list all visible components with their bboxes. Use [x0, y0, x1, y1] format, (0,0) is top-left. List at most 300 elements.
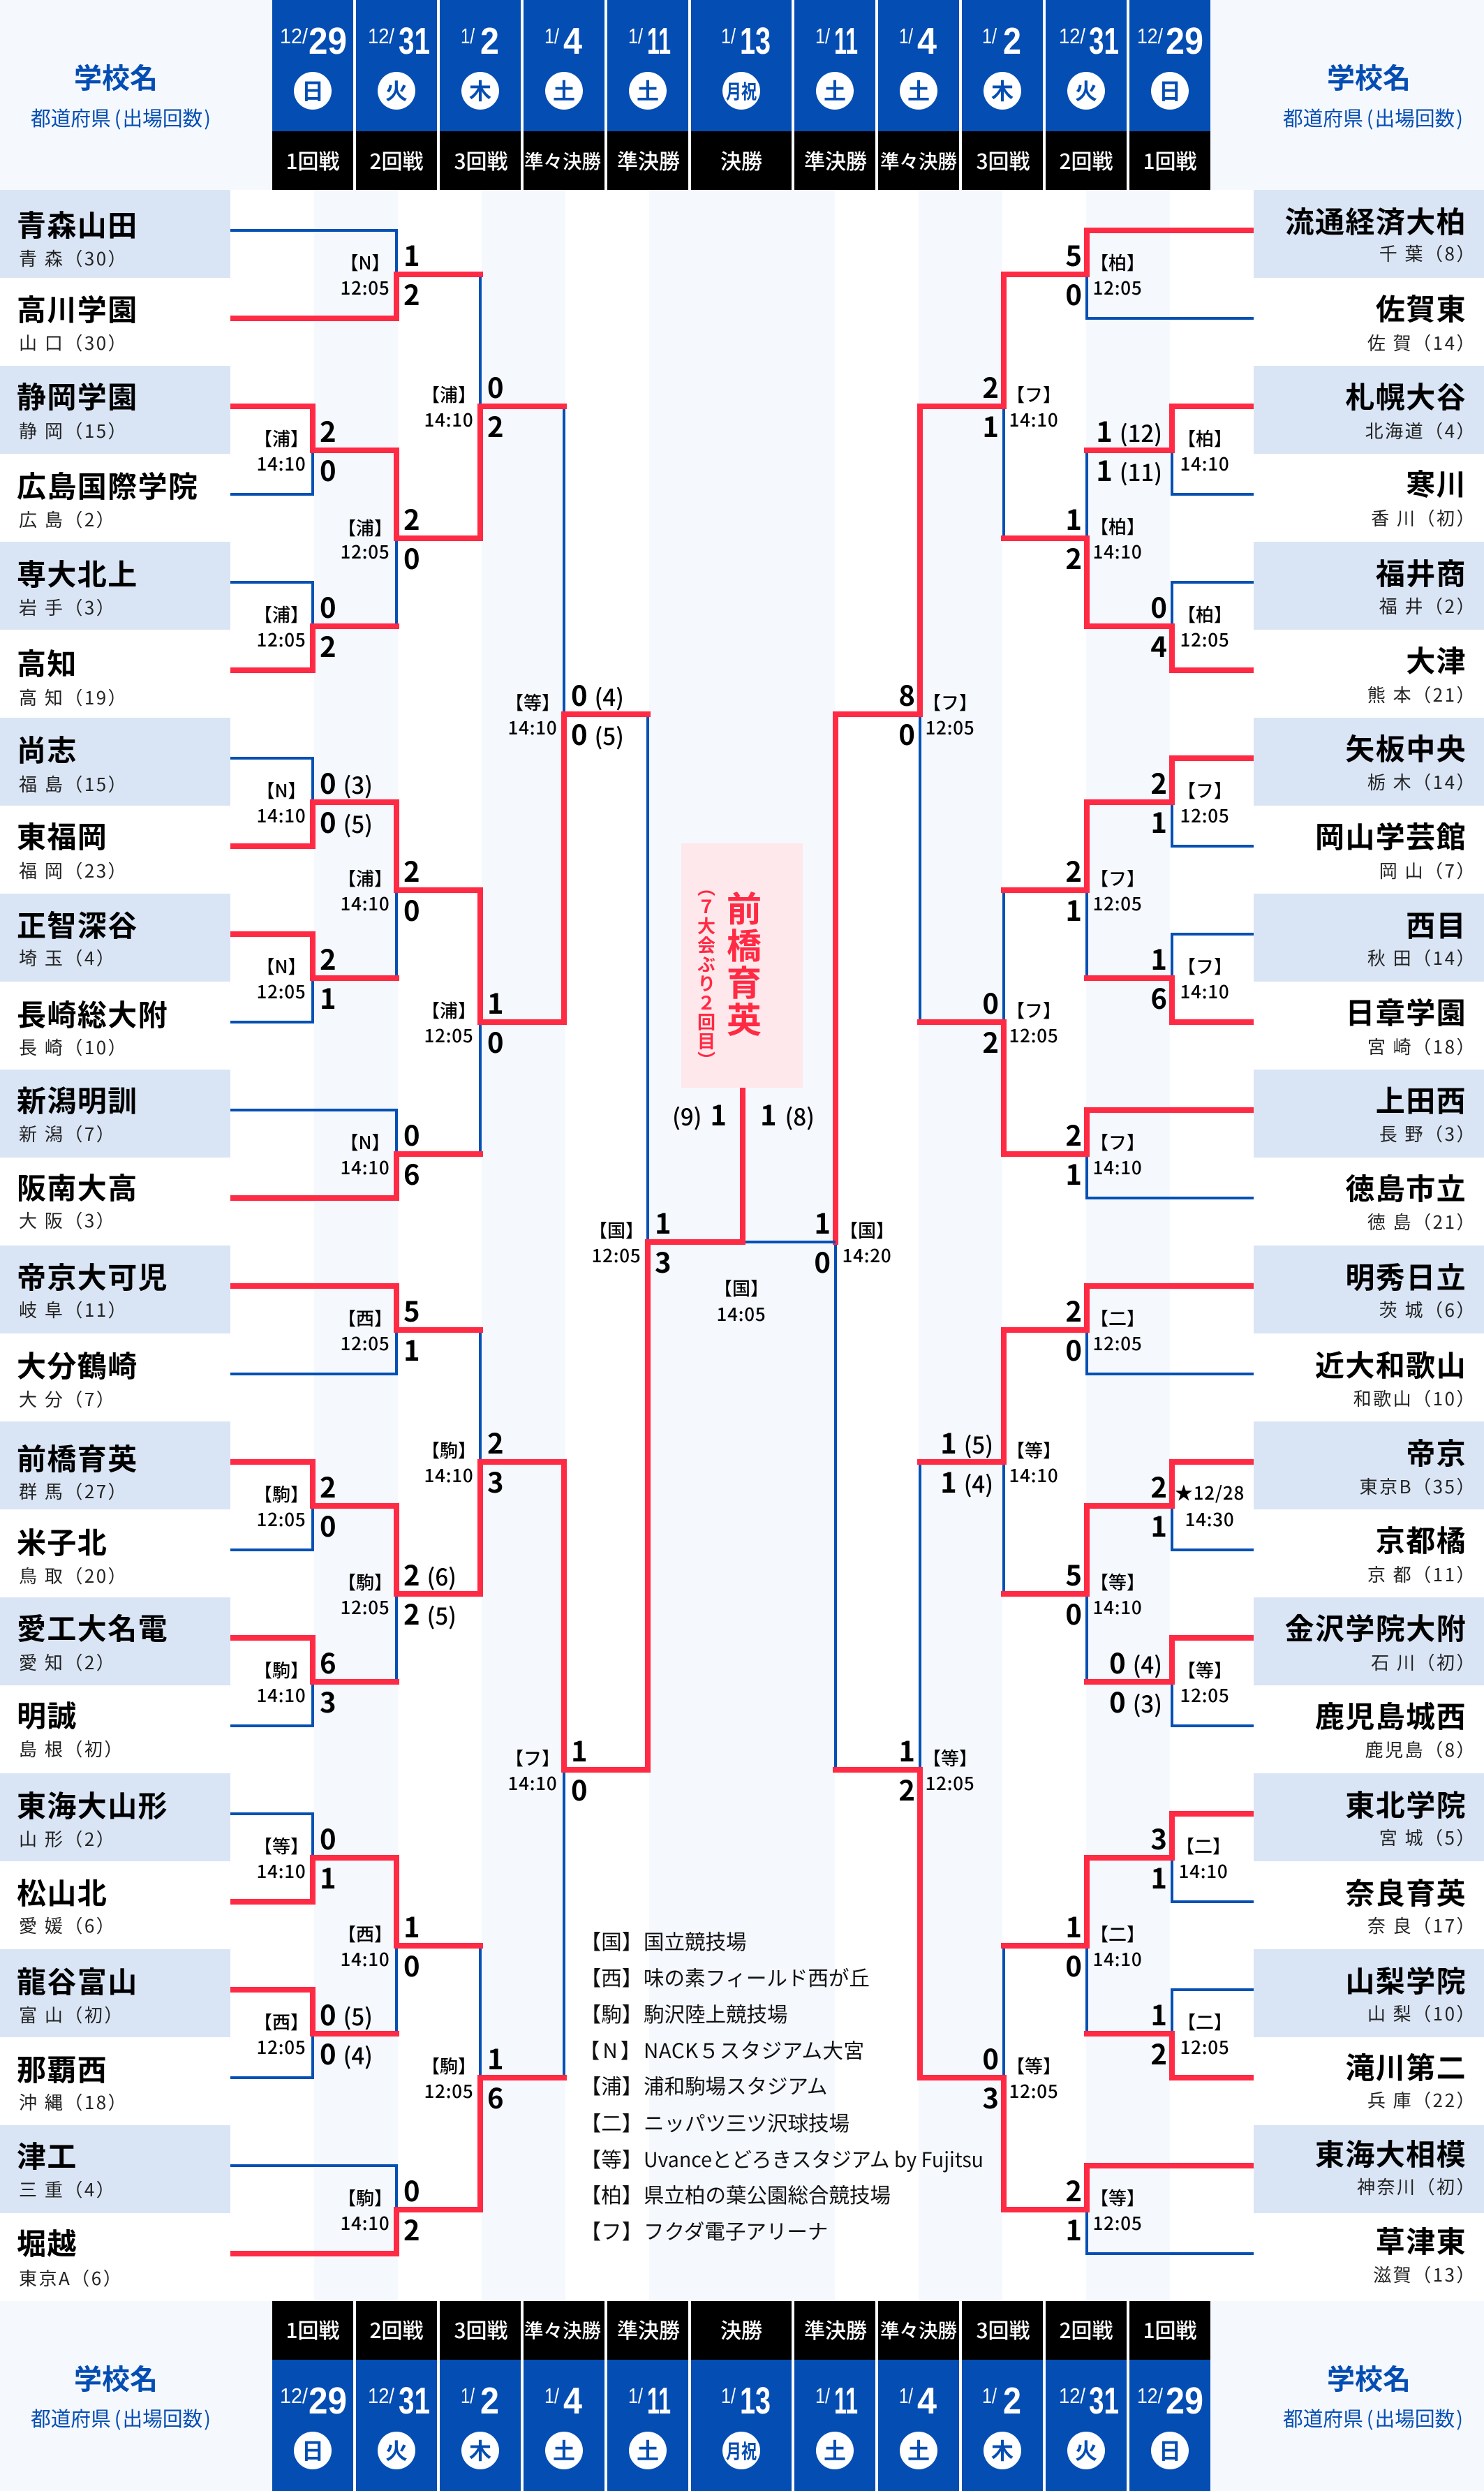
match: 2回戦 帝京 vs 金沢学院大附: 0: [1065, 1592, 1082, 1633]
top header: right school label: 都道府県(出場回数): [1283, 103, 1463, 132]
match: 3回戦 矢板中央 vs 上田西: 12:05: [1009, 1022, 1059, 1048]
match: 札幌大谷 vs 寒川: 1 (12): [1096, 410, 1162, 450]
team: 東福岡: [17, 814, 128, 883]
team: 鹿児島城西: [1315, 1694, 1476, 1762]
match: 3回戦 帝京大可児 vs 前橋育英: 【駒】: [422, 1437, 476, 1463]
team: 明誠: 島 根（初）: [19, 1736, 124, 1761]
match: 上田西 vs 徳島市立: 2: [1065, 1114, 1082, 1154]
team: 青森山田: 青 森（30）: [19, 245, 128, 271]
top header column: 1/11 準決勝: 準決勝: [617, 145, 680, 175]
team: 岡山学芸館: 岡 山（7）: [1379, 857, 1476, 883]
match: 2回戦 静岡学園 vs 高知: 0: [403, 537, 420, 577]
match: 福井商 vs 大津: [1150, 582, 1254, 670]
top header: left school label: 都道府県(出場回数): [31, 103, 211, 132]
match: 帝京 vs 京都橘: ★12/28: [1175, 1479, 1245, 1505]
team: 大分鶴崎: [17, 1343, 138, 1412]
top header column: 1/13 決勝: 決勝: [720, 145, 762, 175]
match: 3回戦 帝京大可児 vs 前橋育英: [396, 1330, 504, 1594]
match: 準々決勝 静岡学園 vs 東福岡: [480, 406, 624, 1022]
top header column: 1/4 準々決勝 right: 1/: [899, 24, 913, 48]
team: 近大和歌山: 近大和歌山: [1315, 1343, 1467, 1385]
match: 2回戦 松山北 vs 龍谷富山: 0: [403, 1944, 420, 1985]
legend: venues: 味の素フィールド西が丘: [644, 1963, 870, 1992]
bottom header column: 1/11 準決勝 right: [794, 2301, 875, 2491]
bottom header column: 12/29 1回戦 right: 12/: [1137, 2383, 1163, 2408]
team: 明誠: 明誠: [17, 1693, 77, 1736]
top header column: 1/2 3回戦: 1/: [461, 24, 475, 48]
bottom header column: 1/2 3回戦 right: 木: [991, 2434, 1014, 2466]
team: 東北学院: [1345, 1782, 1476, 1850]
team: 高知: 高知: [17, 641, 77, 683]
match: 龍谷富山 vs 那覇西: 12:05: [256, 2034, 306, 2060]
match: 龍谷富山 vs 那覇西: 0 (4): [320, 2032, 373, 2073]
match: 尚志 vs 東福岡: 14:10: [256, 802, 306, 828]
match: 3回戦 高川学園 vs 静岡学園: [396, 274, 504, 538]
match: 2回戦 矢板中央 vs 日章学園: 12:05: [1092, 890, 1143, 916]
legend: venues: 県立柏の葉公園総合競技場: [644, 2180, 891, 2209]
match: 山梨学院 vs 滝川第二: 1: [1150, 1993, 1167, 2034]
top header column: 12/29 1回戦 right: 29: [1166, 20, 1203, 62]
bottom header column: 1/13 決勝: 1/: [721, 2383, 736, 2408]
team: 札幌大谷: [1345, 374, 1476, 443]
team: 奈良育英: 奈良育英: [1345, 1870, 1467, 1913]
team: 明秀日立: 明秀日立: [1345, 1255, 1467, 1297]
match: 準々決勝 流通経済大柏 vs 上田西: 8: [898, 674, 915, 714]
top header column: 1/4 準々決勝 right: 4: [917, 20, 937, 62]
top header column: 1/2 3回戦 right: 木: [991, 74, 1014, 106]
team: 前橋育英: 群 馬（27）: [19, 1478, 128, 1504]
match: 前橋育英 vs 米子北: 2: [320, 1465, 336, 1506]
team: 松山北: [17, 1870, 116, 1938]
bottom header column: 12/29 1回戦 right: 日: [1159, 2434, 1181, 2466]
match: 3回戦 流通経済大柏 vs 大津: 2: [982, 366, 999, 406]
top header column: 1/13 決勝: 月祝: [726, 77, 757, 105]
bottom header column: 12/31 2回戦 right: 2回戦: [1059, 2314, 1113, 2344]
background: bracket column stripes: [314, 190, 1170, 2301]
match: 準決勝 流通経済大柏 vs 東海大相模: [814, 714, 920, 1770]
match: 札幌大谷 vs 寒川: [1096, 406, 1254, 494]
match: 明秀日立 vs 近大和歌山: [1065, 1286, 1254, 1374]
match: 西目 vs 日章学園: [1150, 934, 1254, 1022]
match: 準々決勝 帝京 vs 東海大相模: 【等】: [923, 1745, 977, 1771]
match: 上田西 vs 徳島市立: 1: [1065, 1153, 1082, 1193]
match: 正智深谷 vs 長崎総大附: 1: [320, 977, 336, 1017]
top header column: 1/2 3回戦: 木: [469, 74, 491, 106]
team: 流通経済大柏: 流通経済大柏: [1285, 199, 1467, 242]
team: 東福岡: 東福岡: [17, 814, 107, 857]
top header column: 1/11 準決勝 right: 11: [834, 20, 858, 62]
match: 準々決勝 静岡学園 vs 東福岡: 0 (4): [571, 674, 624, 714]
match: 矢板中央 vs 岡山学芸館: 【フ】: [1178, 777, 1232, 803]
match: 札幌大谷 vs 寒川: 14:10: [1180, 450, 1230, 476]
match: 東海大山形 vs 松山北: 【等】: [254, 1833, 309, 1858]
team: 西目: [1367, 903, 1476, 970]
match: 準々決勝 帝京 vs 東海大相模: [898, 1462, 1004, 2078]
match: 東北学院 vs 奈良育英: 【二】: [1176, 1833, 1231, 1858]
team: 鹿児島城西: 鹿児島（8）: [1365, 1736, 1476, 1762]
team: 龍谷富山: [17, 1959, 138, 2027]
match: 2回戦 東福岡 vs 正智深谷: 0: [403, 889, 420, 929]
right teams shaded rows: [1254, 190, 1484, 2213]
bottom header: right school label: [1210, 2301, 1484, 2491]
match: 東北学院 vs 奈良育英: 1: [1150, 1856, 1167, 1897]
bottom header: right school label: 学校名: [1327, 2357, 1411, 2397]
team: 東海大相模: [1315, 2131, 1476, 2199]
team: 広島国際学院: 広島国際学院: [17, 464, 198, 506]
match: 3回戦 東福岡 vs 阪南大高: [396, 890, 504, 1154]
top header column: 12/31 2回戦: 31: [399, 20, 430, 62]
team: 大津: 大津: [1406, 638, 1467, 681]
match: 2回戦 東北学院 vs 滝川第二: 0: [1065, 1944, 1082, 1985]
match: 明秀日立 vs 近大和歌山: 【二】: [1090, 1305, 1145, 1331]
team: 明秀日立: [1345, 1255, 1476, 1322]
team: 福井商: [1376, 551, 1476, 619]
bottom header column: 12/29 1回戦 right: [1129, 2301, 1210, 2491]
match: 東海大相模 vs 草津東: 【等】: [1090, 2185, 1145, 2210]
final match lines and scores: 1 (8): [760, 1093, 815, 1134]
top header column: 1/11 準決勝: 1/: [628, 24, 643, 48]
match: 準決勝 流通経済大柏 vs 東海大相模: 1: [814, 1202, 831, 1242]
team: 上田西: [1376, 1078, 1476, 1146]
bottom header column: 12/29 1回戦: 29: [309, 2380, 347, 2422]
top header column: 12/31 2回戦 right: 火: [1075, 74, 1097, 106]
match: 3回戦 矢板中央 vs 上田西: 0: [982, 982, 999, 1022]
top header column: 12/31 2回戦: [356, 0, 437, 190]
top header column: 12/29 1回戦 right: 1回戦: [1143, 145, 1197, 175]
match: 帝京 vs 京都橘: 1: [1150, 1505, 1167, 1545]
team: 静岡学園: [17, 374, 138, 443]
match: 2回戦 東福岡 vs 正智深谷: 【浦】: [338, 865, 392, 891]
team: 明誠: [17, 1693, 124, 1761]
team: 青森山田: 青森山田: [17, 202, 138, 245]
team: 米子北: 米子北: [17, 1520, 107, 1562]
match: 西目 vs 日章学園: 1: [1150, 938, 1167, 978]
match: 静岡学園 vs 広島国際学院: 14:10: [256, 450, 306, 476]
final match lines and scores: [648, 1091, 836, 1326]
match: 帝京大可児 vs 大分鶴崎: 1: [403, 1329, 420, 1369]
match: 準々決勝 前橋育英 vs 堀越: 0: [571, 1768, 588, 1809]
match: 矢板中央 vs 岡山学芸館: 2: [1150, 762, 1167, 802]
match: 3回戦 帝京大可児 vs 前橋育英: 2: [487, 1421, 504, 1462]
team: 山梨学院: [1345, 1958, 1476, 2026]
team: 帝京大可児: 岐 阜（11）: [19, 1296, 128, 1322]
team: 長崎総大附: 長 崎（10）: [19, 1034, 128, 1060]
bottom header column: 1/2 3回戦: 1/: [461, 2383, 475, 2408]
match: 2回戦 松山北 vs 龍谷富山: 1: [403, 1905, 420, 1946]
team: 静岡学園: 静 岡（15）: [19, 417, 128, 443]
team: 上田西: 長 野（3）: [1379, 1121, 1476, 1146]
team: 徳島市立: 徳島市立: [1345, 1166, 1467, 1208]
match: 準々決勝 静岡学園 vs 東福岡: 0 (5): [571, 713, 624, 753]
match: 静岡学園 vs 広島国際学院: [230, 406, 336, 494]
match: 尚志 vs 東福岡: 【N】: [256, 777, 306, 803]
match: 3回戦 帝京大可児 vs 前橋育英: 3: [487, 1461, 504, 1501]
bottom header column: 12/31 2回戦: 31: [399, 2380, 430, 2422]
bottom header column: 1/4 準々決勝: 1/: [544, 2383, 559, 2408]
team: 高知: 高 知（19）: [19, 684, 128, 710]
team: 滝川第二: 兵 庫（22）: [1367, 2087, 1476, 2113]
bottom header column: 1/11 準決勝 right: 準決勝: [804, 2314, 867, 2344]
match: 3回戦 流通経済大柏 vs 大津: 1: [982, 405, 999, 445]
team: 草津東: 滋賀（13）: [1373, 2261, 1476, 2287]
legend: venues: 駒沢陸上競技場: [644, 1999, 788, 2028]
team: 愛工大名電: 愛工大名電: [17, 1606, 168, 1648]
team: 山梨学院: 山梨学院: [1345, 1958, 1467, 2001]
team: 京都橘: 京都橘: [1376, 1518, 1467, 1560]
bottom header column: 1/4 準々決勝: 準々決勝: [524, 2315, 601, 2343]
team: 大分鶴崎: 大分鶴崎: [17, 1343, 138, 1386]
top header column: 12/31 2回戦 right: 12/: [1059, 24, 1085, 48]
match: 前橋育英 vs 米子北: [230, 1462, 336, 1550]
top header column: 1/4 準々決勝 right: [878, 0, 959, 190]
match: 準々決勝 前橋育英 vs 堀越: 14:10: [507, 1770, 558, 1796]
match: 津工 vs 堀越: [230, 2166, 420, 2254]
match: 愛工大名電 vs 明誠: 6: [320, 1641, 336, 1682]
bottom header column: 1/4 準々決勝 right: 1/: [899, 2383, 913, 2408]
match: 3回戦 東福岡 vs 阪南大高: 12:05: [424, 1022, 474, 1048]
match: 正智深谷 vs 長崎総大附: [230, 934, 336, 1022]
match: 3回戦 流通経済大柏 vs 大津: 14:10: [1009, 406, 1059, 432]
top header column: 12/29 1回戦 right: [1129, 0, 1210, 190]
team: 青森山田: [17, 202, 138, 271]
team: 専大北上: 岩 手（3）: [19, 594, 116, 620]
match: 津工 vs 堀越: 2: [403, 2208, 420, 2249]
match: 東北学院 vs 奈良育英: 14:10: [1178, 1858, 1229, 1884]
match: 2回戦 前橋育英 vs 愛工大名電: 2 (5): [403, 1592, 457, 1633]
team: 長崎総大附: 長崎総大附: [17, 992, 168, 1035]
champion box: 前橋育英: 前橋育英: [719, 891, 769, 1039]
match: 帝京 vs 京都橘: [1150, 1462, 1254, 1550]
bottom header column: 1/11 準決勝: [607, 2301, 688, 2491]
team: 米子北: [17, 1520, 128, 1588]
match: 2回戦 東北学院 vs 滝川第二: 1: [1065, 1905, 1082, 1946]
match: 山梨学院 vs 滝川第二: 2: [1150, 2032, 1167, 2073]
team: 近大和歌山: [1315, 1343, 1476, 1411]
bottom header column: 1/2 3回戦 right: 2: [1003, 2380, 1021, 2422]
team: 岡山学芸館: 岡山学芸館: [1315, 814, 1467, 857]
match: 2回戦 札幌大谷 vs 大津: 【柏】: [1090, 513, 1145, 539]
match: 2回戦 静岡学園 vs 高知: 【浦】: [338, 515, 392, 540]
match: 流通経済大柏 vs 佐賀東: 12:05: [1092, 274, 1143, 300]
bottom header column: 12/31 2回戦 right: 火: [1075, 2434, 1097, 2466]
match: 準決勝 流通経済大柏 vs 東海大相模: 14:20: [842, 1242, 892, 1268]
legend: venues: 【フ】: [581, 2216, 642, 2245]
match: 専大北上 vs 高知: 【浦】: [254, 601, 309, 627]
match: 正智深谷 vs 長崎総大附: 12:05: [256, 978, 306, 1004]
match: 新潟明訓 vs 阪南大高: 【N】: [340, 1129, 390, 1155]
match: 東海大山形 vs 松山北: [230, 1814, 336, 1902]
match: 2回戦 矢板中央 vs 日章学園: [1065, 802, 1172, 978]
match: 準々決勝 帝京 vs 東海大相模: 1: [898, 1729, 915, 1770]
team: 阪南大高: [17, 1165, 138, 1233]
team: 日章学園: [1345, 990, 1476, 1059]
match: 津工 vs 堀越: 0: [403, 2169, 420, 2210]
team: 帝京: [1360, 1431, 1476, 1499]
bottom header column: 12/31 2回戦: 2回戦: [369, 2314, 424, 2344]
top header column: 12/31 2回戦 right: 31: [1089, 20, 1119, 62]
top header column: 12/29 1回戦 right: 日: [1159, 74, 1181, 106]
team: 前橋育英: 前橋育英: [17, 1436, 138, 1479]
match: 準決勝 東福岡 vs 前橋育英: 3: [655, 1241, 671, 1281]
match: 2回戦 松山北 vs 龍谷富山: [313, 1858, 420, 2034]
bottom header column: 12/29 1回戦 right: 1回戦: [1143, 2314, 1197, 2344]
match: 矢板中央 vs 岡山学芸館: [1150, 758, 1254, 846]
final match lines and scores: 【国】: [714, 1275, 769, 1301]
match: 帝京大可児 vs 大分鶴崎: 5: [403, 1289, 420, 1330]
team: 阪南大高: 阪南大高: [17, 1165, 138, 1208]
match: 2回戦 東北学院 vs 滝川第二: 14:10: [1092, 1946, 1143, 1972]
bottom header column: 12/31 2回戦 right: 31: [1089, 2380, 1119, 2422]
team: 日章学園: 日章学園: [1345, 990, 1467, 1033]
bottom header column: 12/31 2回戦 right: [1046, 2301, 1127, 2491]
team: 西目: 西目: [1406, 903, 1467, 945]
match: 準決勝 流通経済大柏 vs 東海大相模: 0: [814, 1241, 831, 1281]
team: 矢板中央: [1345, 726, 1476, 794]
bottom header column: 1/4 準々決勝: [524, 2301, 604, 2491]
match: 札幌大谷 vs 寒川: 【柏】: [1178, 425, 1232, 451]
match: 準々決勝 静岡学園 vs 東福岡: 【等】: [505, 689, 560, 715]
team: 大津: [1367, 638, 1476, 707]
match: 正智深谷 vs 長崎総大附: 2: [320, 938, 336, 978]
match: 2回戦 松山北 vs 龍谷富山: 【西】: [338, 1921, 392, 1946]
team: 東北学院: 東北学院: [1345, 1782, 1467, 1825]
top header column: 1/11 準決勝: 11: [647, 20, 671, 62]
match: 山梨学院 vs 滝川第二: 12:05: [1180, 2034, 1230, 2060]
match: 静岡学園 vs 広島国際学院: 2: [320, 410, 336, 450]
match: 2回戦 東福岡 vs 正智深谷: 14:10: [340, 890, 390, 916]
team: 愛工大名電: 愛 知（2）: [19, 1649, 116, 1675]
legend: venues: ニッパツ三ツ沢球技場: [644, 2108, 849, 2137]
team: 愛工大名電: [17, 1606, 168, 1675]
top header column: 1/2 3回戦 right: 1/: [982, 24, 997, 48]
match: 尚志 vs 東福岡: [230, 758, 373, 846]
match: 帝京大可児 vs 大分鶴崎: 12:05: [340, 1330, 390, 1356]
match: 2回戦 前橋育英 vs 愛工大名電: [313, 1506, 457, 1682]
match: 龍谷富山 vs 那覇西: 0 (5): [320, 1993, 373, 2034]
match: 東海大相模 vs 草津東: [1065, 2166, 1254, 2254]
bottom header column: 1/4 準々決勝: 土: [553, 2434, 575, 2466]
top header column: 12/31 2回戦 right: 2回戦: [1059, 145, 1113, 175]
team: 大津: 熊 本（21）: [1367, 681, 1476, 707]
match: 尚志 vs 東福岡: 0 (5): [320, 801, 373, 841]
bottom header column: 12/29 1回戦: 1回戦: [285, 2314, 340, 2344]
team: 帝京大可児: 帝京大可児: [17, 1255, 168, 1297]
top header column: 12/31 2回戦 right: [1046, 0, 1127, 190]
match: 準決勝 流通経済大柏 vs 東海大相模: 【国】: [840, 1217, 894, 1243]
match: 帝京大可児 vs 大分鶴崎: 【西】: [338, 1305, 392, 1331]
match: 3回戦 矢板中央 vs 上田西: 【フ】: [1007, 997, 1061, 1023]
top header column: 1/13 決勝: [691, 0, 792, 190]
match: 青森山田 vs 高川学園: 12:05: [340, 274, 390, 300]
match: 3回戦 高川学園 vs 静岡学園: 【浦】: [422, 381, 476, 407]
match: 3回戦 東北学院 vs 東海大相模: [982, 1946, 1087, 2210]
match: 3回戦 流通経済大柏 vs 大津: 【フ】: [1007, 381, 1061, 407]
match: 3回戦 東福岡 vs 阪南大高: 0: [487, 1021, 504, 1061]
match: 3回戦 東福岡 vs 阪南大高: 【浦】: [422, 997, 476, 1023]
team: 高川学園: 山 口（30）: [19, 330, 128, 355]
team: 龍谷富山: 富 山（初）: [19, 2002, 124, 2027]
match: 愛工大名電 vs 明誠: 3: [320, 1680, 336, 1721]
match: 3回戦 東福岡 vs 阪南大高: 1: [487, 982, 504, 1022]
match: 専大北上 vs 高知: 12:05: [256, 626, 306, 652]
team: 阪南大高: 大 阪（3）: [19, 1207, 116, 1233]
top header column: 1/2 3回戦 right: 3回戦: [976, 145, 1030, 175]
match: 東海大山形 vs 松山北: 0: [320, 1817, 336, 1858]
champion box: 前橋育英: （７大会ぶり２回目）: [694, 878, 719, 1070]
match: 金沢学院大附 vs 鹿児島城西: [1109, 1638, 1254, 1726]
match: 2回戦 静岡学園 vs 高知: 12:05: [340, 538, 390, 564]
match: 前橋育英 vs 米子北: 12:05: [256, 1506, 306, 1532]
team: 徳島市立: 徳 島（21）: [1367, 1208, 1476, 1234]
bottom header column: 1/11 準決勝: 11: [647, 2380, 671, 2422]
match: 準決勝 東福岡 vs 前橋育英: 12:05: [591, 1242, 641, 1268]
top header column: 1/11 準決勝 right: [794, 0, 875, 190]
match: 帝京 vs 京都橘: 2: [1150, 1465, 1167, 1506]
bottom header column: 12/31 2回戦: 12/: [368, 2383, 394, 2408]
top header column: 12/31 2回戦: 火: [385, 74, 408, 106]
bottom header column: 1/2 3回戦: [440, 2301, 521, 2491]
bottom header: right school label: 都道府県(出場回数): [1283, 2404, 1463, 2432]
match: 福井商 vs 大津: 4: [1150, 625, 1167, 665]
team: 静岡学園: 静岡学園: [17, 374, 138, 417]
match: 東海大山形 vs 松山北: 14:10: [256, 1858, 306, 1884]
team: 草津東: 草津東: [1376, 2219, 1467, 2261]
match: 3回戦 矢板中央 vs 上田西: 2: [982, 1021, 999, 1061]
team: 尚志: [17, 727, 128, 797]
match: 準々決勝 流通経済大柏 vs 上田西: 0: [898, 713, 915, 753]
bottom header column: 12/29 1回戦: 日: [302, 2434, 324, 2466]
match: 愛工大名電 vs 明誠: [230, 1638, 336, 1726]
match: 2回戦 帝京 vs 金沢学院大附: 14:10: [1092, 1594, 1143, 1620]
top header: left school label: 学校名: [74, 56, 158, 96]
match: 2回戦 矢板中央 vs 日章学園: 2: [1065, 850, 1082, 890]
team: 金沢学院大附: 金沢学院大附: [1285, 1606, 1467, 1648]
team: 正智深谷: 正智深谷: [17, 903, 138, 945]
match: 2回戦 静岡学園 vs 高知: [313, 450, 420, 626]
top header column: 12/29 1回戦: 日: [302, 74, 324, 106]
match: 2回戦 前橋育英 vs 愛工大名電: 2 (6): [403, 1553, 457, 1594]
team: 寒川: 香 川（初）: [1371, 505, 1476, 531]
team: 前橋育英: [17, 1436, 138, 1504]
match: 山梨学院 vs 滝川第二: [1150, 1990, 1254, 2078]
top header column: 1/11 準決勝 right: 準決勝: [804, 145, 867, 175]
team: 龍谷富山: 龍谷富山: [17, 1959, 138, 2002]
bottom header column: 1/11 準決勝: 土: [637, 2434, 659, 2466]
match: 2回戦 帝京 vs 金沢学院大附: [1065, 1506, 1172, 1682]
match: 前橋育英 vs 米子北: 【駒】: [254, 1481, 309, 1507]
top header column: 12/29 1回戦: 29: [309, 20, 347, 62]
match: 準々決勝 流通経済大柏 vs 上田西: [898, 406, 1004, 1022]
match: 帝京 vs 京都橘: 14:30: [1185, 1506, 1235, 1532]
match: 新潟明訓 vs 阪南大高: 14:10: [340, 1154, 390, 1180]
match: 静岡学園 vs 広島国際学院: 【浦】: [254, 425, 309, 451]
match: 3回戦 明秀日立 vs 帝京: 【等】: [1007, 1437, 1061, 1463]
top header column: 12/29 1回戦 right: 12/: [1137, 24, 1163, 48]
match: 愛工大名電 vs 明誠: 14:10: [256, 1682, 306, 1708]
bottom header: left school label: [0, 2301, 272, 2491]
match: 3回戦 東北学院 vs 東海大相模: 0: [982, 2037, 999, 2078]
top header column: 1/4 準々決勝 right: 準々決勝: [880, 146, 957, 174]
match: 2回戦 東福岡 vs 正智深谷: 2: [403, 850, 420, 890]
team: 滝川第二: [1345, 2045, 1476, 2113]
top header column: 1/4 準々決勝: 4: [563, 20, 582, 62]
match: 帝京大可児 vs 大分鶴崎: [230, 1286, 420, 1374]
match: 新潟明訓 vs 阪南大高: 0: [403, 1114, 420, 1154]
match: 3回戦 松山北 vs 堀越: [396, 1946, 504, 2210]
match: 津工 vs 堀越: 【駒】: [338, 2185, 392, 2210]
match: 2回戦 東福岡 vs 正智深谷: [313, 802, 420, 978]
team: 広島国際学院: 広 島（2）: [19, 506, 116, 532]
